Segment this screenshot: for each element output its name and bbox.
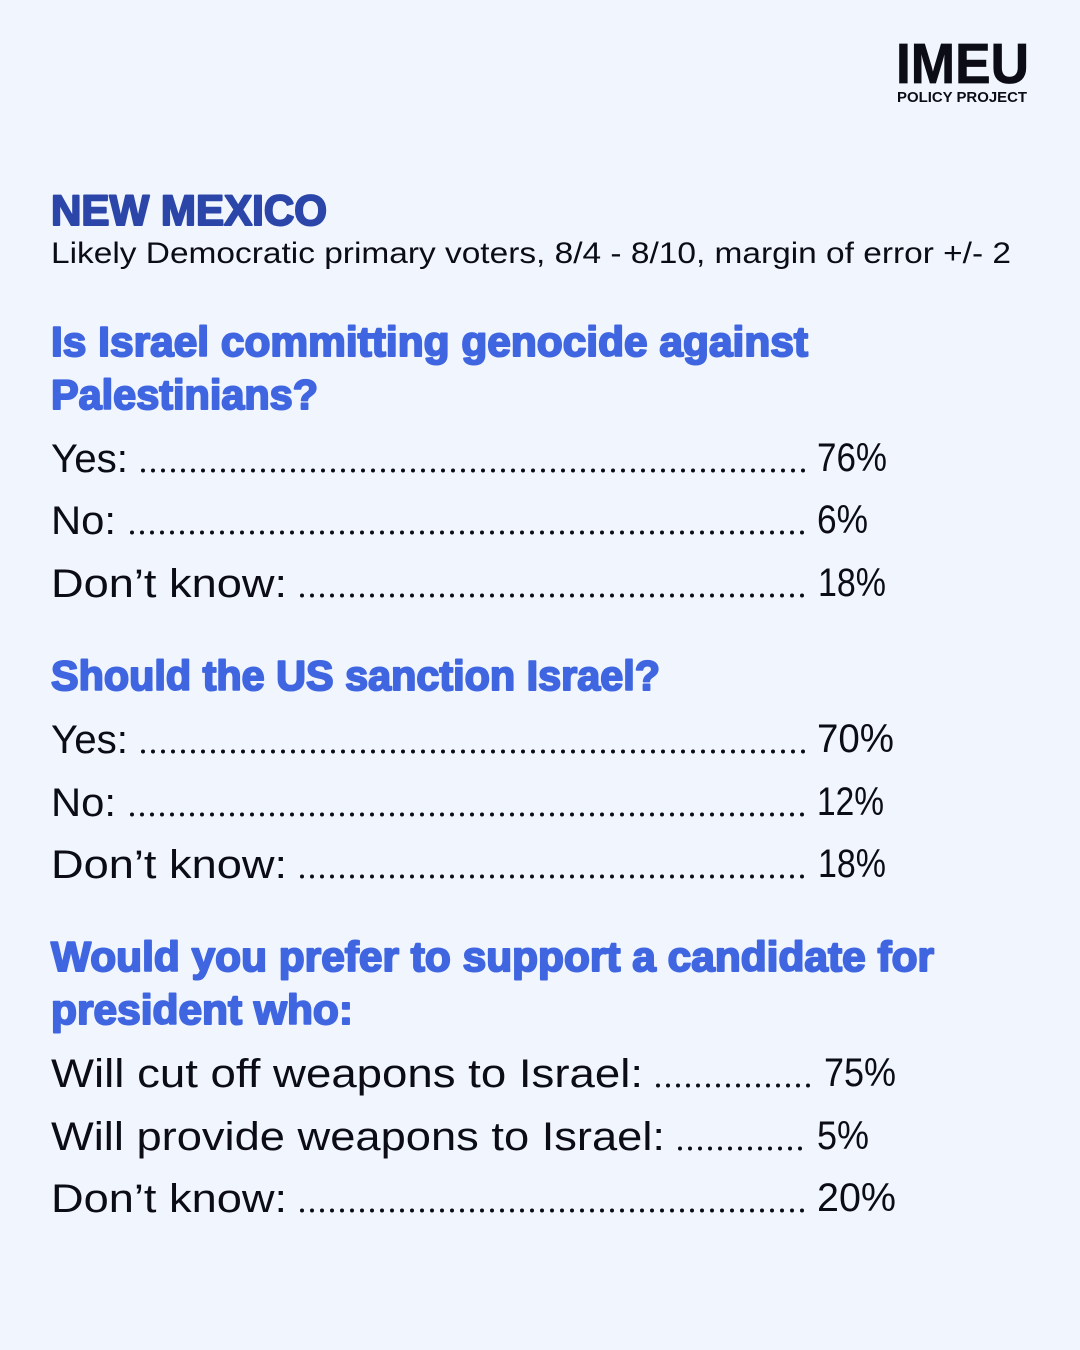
row: don't know 20%: 20% xyxy=(817,1176,896,1220)
row: yes 70%: 70% xyxy=(817,717,894,761)
logo: IMEU Policy Project: IMEU xyxy=(896,32,1029,96)
row: yes 76% xyxy=(51,436,887,481)
logo: IMEU Policy Project: POLICY PROJECT xyxy=(897,90,1027,106)
heading: genocide question: Palestinians? xyxy=(51,371,318,418)
panel: genocide question xyxy=(51,318,887,606)
row: don't know 18%: Don’t know: xyxy=(51,562,287,606)
row: cut off weapons 75%: Will cut off weapons to Israel: xyxy=(51,1052,643,1096)
row: don't know 20% xyxy=(51,1176,896,1221)
row: cut off weapons 75% xyxy=(51,1051,896,1096)
row: no 12% xyxy=(51,780,884,825)
heading: genocide question xyxy=(51,318,808,418)
row: yes 70%: Yes: xyxy=(51,718,128,762)
heading: candidate preference question: president who: xyxy=(51,986,353,1033)
heading: candidate preference question xyxy=(51,933,934,1033)
row: yes 70% xyxy=(51,717,894,762)
row: don't know 18%: Don’t know: xyxy=(51,843,287,887)
row: don't know 18%: 18% xyxy=(818,842,886,886)
row: provide weapons 5% xyxy=(51,1114,869,1159)
row: yes 76%: 76% xyxy=(817,436,887,480)
panel: sanctions question xyxy=(51,652,894,887)
row: no 12%: 12% xyxy=(817,780,884,824)
heading: genocide question: Is Israel committing genocide against xyxy=(51,318,808,365)
row: don't know 20%: Don’t know: xyxy=(51,1177,287,1221)
row: no 6%: No: xyxy=(51,499,116,543)
row: provide weapons 5%: Will provide weapons to Israel: xyxy=(51,1115,665,1159)
subtitle: poll details: Likely Democratic primary voters, 8/4 - 8/10, margin of error +/- 2 xyxy=(51,237,1011,270)
title: New Mexico: NEW MEXICO xyxy=(51,187,327,235)
row: no 12%: No: xyxy=(51,781,116,825)
row: no 6%: 6% xyxy=(817,498,868,542)
row: don't know 18% xyxy=(51,561,886,606)
row: no 6% xyxy=(51,498,868,543)
row: cut off weapons 75%: 75% xyxy=(824,1051,896,1095)
heading: candidate preference question: Would you prefer to support a candidate for xyxy=(51,933,934,980)
heading: sanctions question: Should the US sanction Israel? xyxy=(51,652,660,699)
row: provide weapons 5%: 5% xyxy=(817,1114,869,1158)
panel: candidate preference question xyxy=(51,933,934,1221)
row: don't know 18% xyxy=(51,842,886,887)
row: don't know 18%: 18% xyxy=(818,561,886,605)
row: yes 76%: Yes: xyxy=(51,437,128,481)
